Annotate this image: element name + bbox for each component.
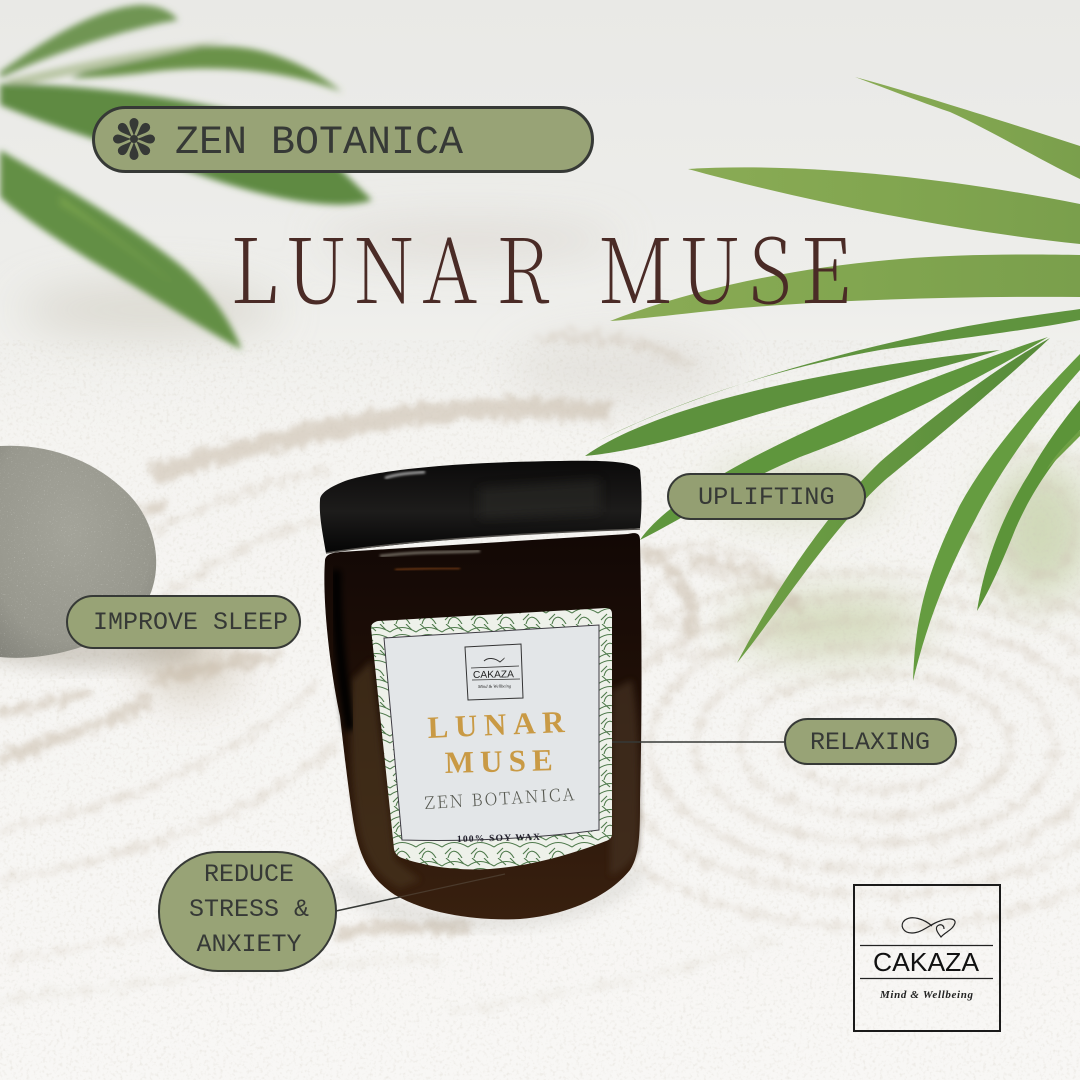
brand pill: Zen Botanica: ZEN BOTANICA — [175, 121, 463, 166]
product: candle jar — [320, 461, 642, 920]
jar label: 100% SOY WAX — [457, 833, 540, 845]
connector: reduce stress over jar — [400, 874, 505, 897]
benefit pill: relaxing: RELAXING — [810, 728, 930, 757]
title — [230, 200, 851, 330]
icon: flower — [113, 118, 155, 160]
brand pill: Zen Botanica — [94, 108, 592, 172]
jar label: ZEN BOTANICA — [424, 780, 575, 814]
stone — [0, 440, 200, 668]
logo: Cakaza — [854, 885, 1000, 1031]
benefit pill: improve sleep: IMPROVE SLEEP — [93, 608, 288, 637]
title: MUSE — [599, 200, 851, 330]
label text: LUNAR — [427, 704, 566, 745]
benefit pill: uplifting: UPLIFTING — [698, 483, 835, 512]
jar label: MUSE — [444, 742, 553, 780]
logo: Cakaza: Mind & Wellbeing — [879, 989, 974, 1001]
benefit pill: reduce stress and anxiety: REDUCE — [204, 860, 294, 889]
label logo — [465, 644, 523, 700]
jar body — [324, 533, 642, 919]
benefit pill: relaxing — [785, 719, 956, 764]
benefit pill: reduce stress and anxiety: STRESS & — [189, 895, 309, 924]
connector: relaxing — [612, 741, 786, 743]
jar lid — [320, 461, 642, 553]
benefit pill: reduce stress and anxiety — [159, 852, 336, 971]
label logo: CAKAZA — [473, 669, 514, 681]
label logo: Mind & Wellbeing — [477, 683, 512, 689]
benefit pill: uplifting — [668, 474, 865, 519]
title: LUNAR — [230, 200, 550, 330]
benefit pill: reduce stress and anxiety: ANXIETY — [196, 930, 302, 959]
connector: reduce stress — [336, 897, 400, 911]
benefit pill: improve sleep — [67, 596, 300, 648]
logo: Cakaza: CAKAZA — [873, 947, 980, 977]
leaves: sharp right palm fronds — [585, 77, 1080, 681]
leaves: blurred top-left palm fronds — [0, 5, 372, 350]
jar label — [371, 608, 612, 869]
icon: infinity heart — [902, 918, 955, 937]
